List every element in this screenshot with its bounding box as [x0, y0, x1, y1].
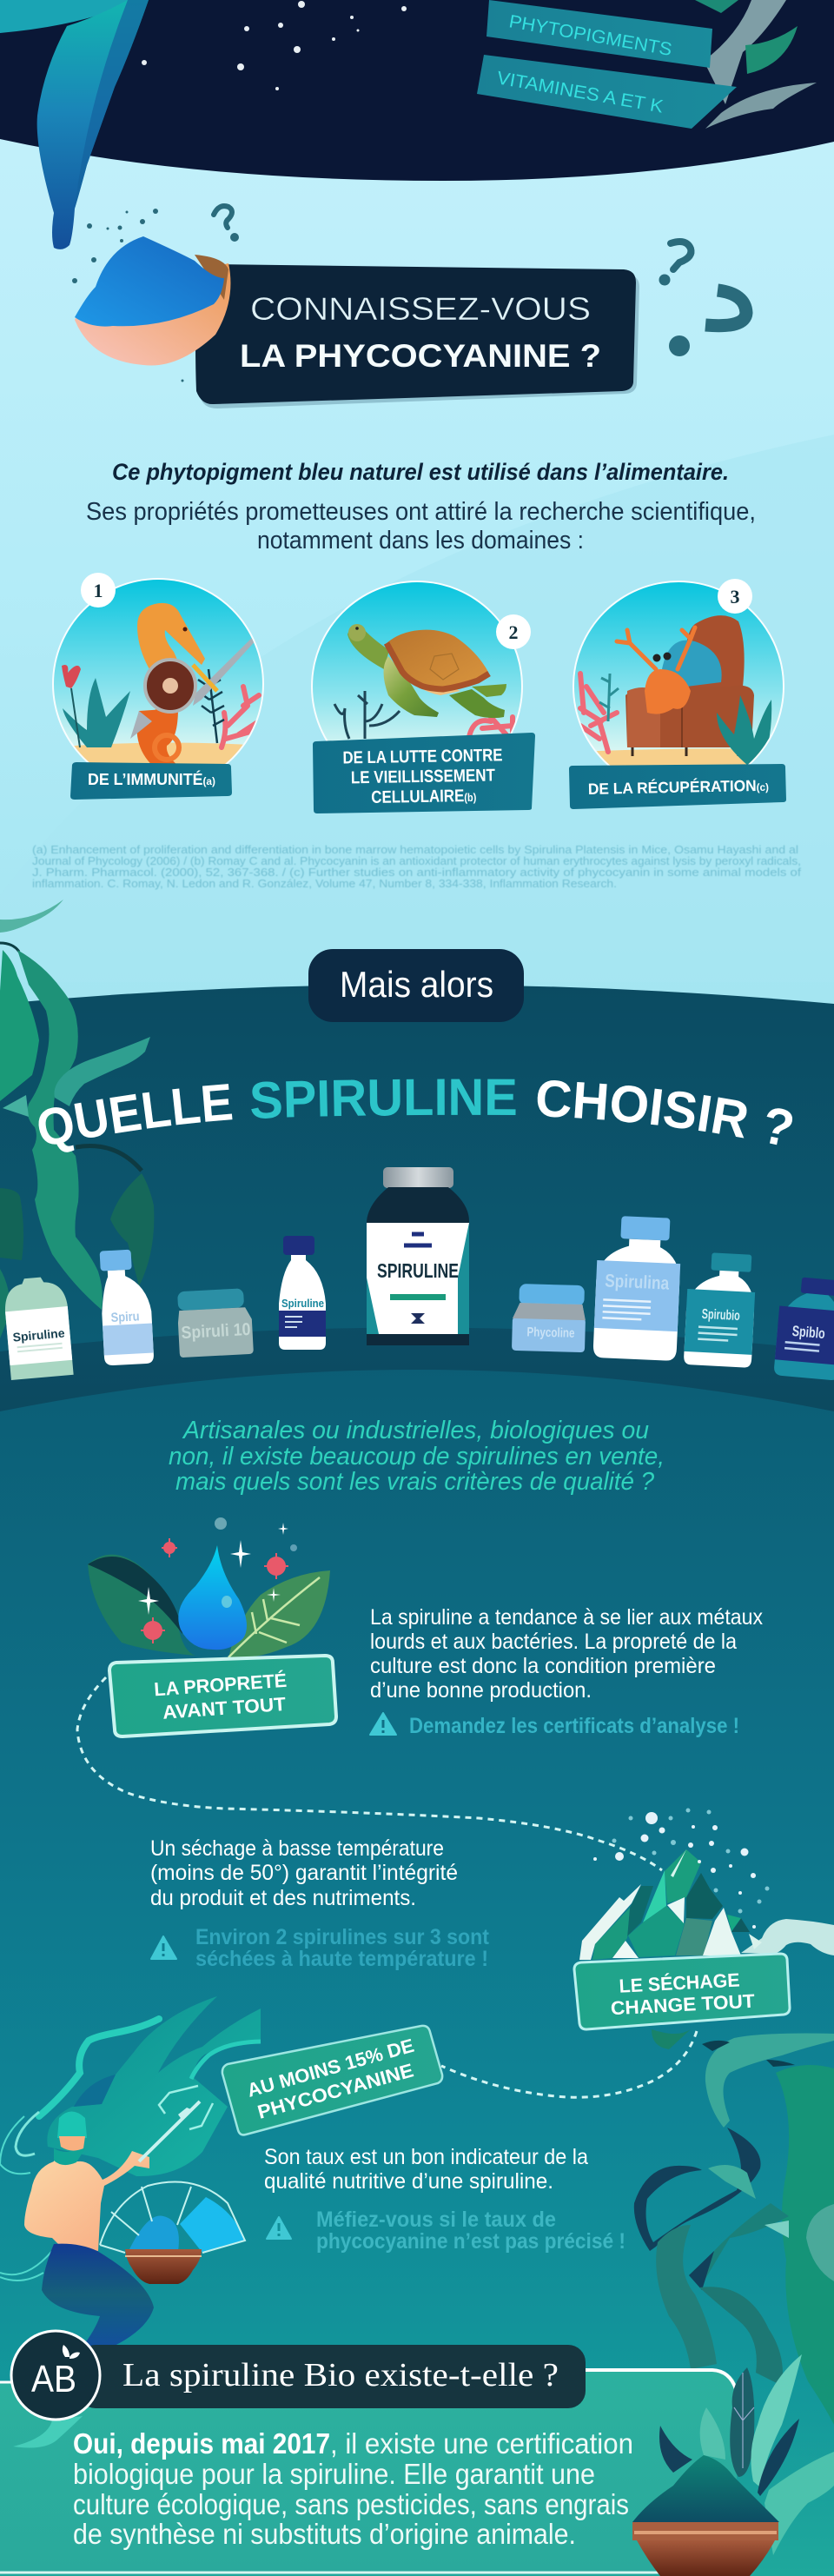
label: de l'immunité: DE L’IMMUNITÉ(a) [88, 770, 215, 788]
mermaid [0, 1996, 261, 2347]
bottle 6 [592, 1215, 682, 1361]
intro text: Ce phytopigment bleu naturel est utilisé dans l’alimentaire. [112, 459, 729, 485]
footnote references [32, 844, 802, 890]
text: propreté: La spiruline a tendance à se lier aux métaux [370, 1605, 763, 1630]
bottle 5: Phycoline [526, 1325, 575, 1341]
label: récupération [569, 764, 786, 809]
bottle 6: Spirulina [605, 1271, 670, 1294]
dashed journey path [77, 1677, 697, 2097]
background decoration: diagonal light band [0, 435, 834, 982]
badge 2 [496, 614, 531, 649]
bottle 2 [99, 1249, 154, 1365]
bottle 3: Spiruli 10 [181, 1320, 251, 1343]
badge 2: 2 [509, 621, 518, 643]
warning: haute température: Environ 2 spirulines sur 3 sont [195, 1925, 490, 1949]
turtle [348, 631, 389, 669]
panel: immunité [52, 573, 269, 800]
label: lutte [313, 733, 535, 813]
title line two: LA PHYCOCYANINE ? [240, 338, 601, 374]
bottle 7 [684, 1251, 757, 1368]
text: au moins 15% label [222, 2026, 442, 2134]
warning: méfiez-vous: phycocyanine n’est pas précisé ! [316, 2229, 626, 2254]
bottle 8 [773, 1276, 834, 1381]
footnote references: (a) Enhancement of proliferation and differentiation in bone marrow hematopoietic cells by Spirulina Platensis in Mice, Osamu Hayashi and al [32, 844, 798, 856]
label: le séchage change tout [574, 1954, 790, 2029]
body text: , il existe une certification [330, 2427, 633, 2460]
label: vitamines [477, 55, 737, 129]
sparkles [138, 1523, 288, 1615]
top dark night panel [0, 0, 834, 181]
intro question text: Artisanales ou industrielles, biologiques ou [182, 1417, 649, 1444]
mais alors pill: Mais alors [340, 964, 493, 1005]
warning: méfiez-vous [267, 2208, 626, 2254]
dark coral [334, 691, 400, 739]
icon: AB logo [11, 2331, 100, 2420]
whale tail [0, 0, 149, 249]
text: propreté: culture est donc la condition première [370, 1654, 716, 1678]
label: récupération: DE LA RÉCUPÉRATION(c) [588, 776, 769, 798]
heading: quelle spiruline choisir: QUELLE [38, 1084, 233, 1152]
badge 3 [718, 579, 752, 614]
intro text: Ses propriétés prometteuses ont attiré la recherche scientifique, [86, 498, 756, 526]
bottle 5 [512, 1284, 586, 1352]
label: la propreté avant tout: AVANT TOUT [162, 1693, 287, 1723]
body text: de synthèse ni substituts d’origine animale. [73, 2518, 576, 2550]
text: son taux: Son taux est un bon indicateur de la [264, 2145, 588, 2169]
plant [717, 695, 771, 769]
label: lutte: CELLULAIRE(b) [371, 787, 476, 807]
warning: haute température [151, 1925, 490, 1971]
panel: récupération [569, 579, 786, 809]
intro text: notamment dans les domaines : [257, 527, 584, 554]
coral [222, 687, 259, 747]
seahorse [137, 603, 205, 713]
text: propreté: d’une bonne production. [370, 1678, 592, 1703]
icon: bowl of blue powder [72, 209, 230, 382]
text: son taux: qualité nutritive d’une spiruline. [264, 2169, 553, 2194]
text: au moins 15% label: PHYCOCYANINE [255, 2059, 416, 2123]
seaweed right [634, 2029, 834, 2425]
vase of green powder [632, 2455, 779, 2576]
heading: La spiruline Bio existe-t-elle ? [122, 2357, 559, 2393]
bottle 4: Spiruline [281, 1297, 324, 1310]
foreground tail fin [13, 2416, 83, 2447]
intro question text [169, 1417, 665, 1496]
warning: haute température: séchées à haute température ! [195, 1947, 488, 1971]
label: la propreté avant tout: LA PROPRETÉ [154, 1670, 288, 1700]
bottle 1 [3, 1275, 74, 1380]
title card [195, 264, 639, 408]
icon: ice mountains [579, 1808, 834, 1960]
heading: quelle spiruline choisir [38, 1079, 792, 1152]
background: pale sky water [0, 0, 834, 1130]
bottle 2: Spiru [110, 1309, 140, 1325]
warning: méfiez-vous: Méfiez-vous si le taux de [316, 2208, 556, 2232]
bottle shelf band [0, 1328, 834, 1411]
body text: Oui, depuis mai 2017 [73, 2427, 330, 2460]
title line one: CONNAISSEZ-VOUS [250, 291, 591, 327]
warning: certificats: Demandez les certificats d’analyse ! [409, 1714, 739, 1738]
bottle main: spiruline [367, 1167, 469, 1345]
tail [42, 2244, 154, 2347]
snowflakes [593, 1812, 756, 1929]
body [24, 2151, 149, 2251]
heading: quelle spiruline choisir: SPIRULINE [251, 1079, 516, 1119]
leaves behind vase [659, 2354, 834, 2555]
bottle main: spiruline: SPIRULINE [377, 1259, 459, 1282]
text: séchage: du produit et des nutriments. [150, 1886, 416, 1910]
text: son taux [264, 2145, 588, 2194]
mais alors pill [308, 949, 524, 1022]
body text: biologique pour la spiruline. Elle garantit une [73, 2458, 595, 2490]
label: la propreté avant tout [109, 1656, 336, 1736]
bottle 3 [176, 1288, 254, 1358]
bottle 1: Spiruline [12, 1325, 65, 1344]
label: vitamines: VITAMINES A ET K [495, 68, 665, 117]
bottle 4 [279, 1236, 326, 1350]
label: de l'immunité [70, 762, 232, 800]
body text [73, 2427, 633, 2550]
coral [580, 674, 617, 752]
stars [142, 1, 407, 90]
panel: lutte contre le vieillissement [311, 581, 535, 813]
pink coral [469, 717, 513, 739]
text: propreté [370, 1605, 763, 1703]
icon: water drop with leaves [88, 1517, 330, 1658]
badge 3: 3 [730, 586, 740, 607]
armchair [685, 615, 745, 687]
label: le séchage change tout: CHANGE TOUT [610, 1990, 756, 2019]
heading pill [78, 2345, 586, 2408]
label: phytopigments: PHYTOPIGMENTS [507, 11, 673, 60]
label: lutte: DE LA LUTTE CONTRE [342, 746, 503, 767]
text: propreté: lourds et aux bactéries. La propreté de la [370, 1630, 737, 1654]
text: séchage: (moins de 50°) garantit l’intégrité [150, 1861, 458, 1885]
label: lutte: LE VIEILLISSEMENT [351, 766, 495, 787]
badge 1 [81, 573, 116, 607]
icon: question marks [214, 206, 746, 356]
text: séchage: Un séchage à basse température [150, 1836, 444, 1861]
bottle 7: Spirubio [701, 1307, 740, 1324]
intro text [86, 459, 756, 554]
icon: AB logo: AB [31, 2358, 76, 2400]
panel: la spiruline bio [0, 2331, 737, 2573]
footnote references: J. Pharm. Pharmacol. (2000), 52, 367-368. / (c) Further studies on anti-inflammatory activity of phycocyanin in some animal models of [32, 866, 802, 879]
label: le séchage change tout: LE SÉCHAGE [619, 1969, 740, 1997]
heading: quelle spiruline choisir: CHOISIR ? [537, 1080, 792, 1145]
hermit crab [662, 641, 722, 687]
hair [47, 1996, 261, 2176]
intro question text: non, il existe beaucoup de spirulines en vente, [169, 1443, 665, 1471]
label: phytopigments [486, 0, 712, 68]
fan and powder [100, 2181, 245, 2284]
badge 1: 1 [94, 580, 103, 601]
seaweed left [0, 900, 154, 1338]
sword [193, 638, 254, 706]
seaweed beside labels [695, 0, 817, 129]
intro question text: mais quels sont les vrais critères de qualité ? [175, 1468, 655, 1496]
plant [63, 678, 130, 747]
footnote references: Journal of Phycology (2006) / (b) Romay C and al. Phycocyanin is an antioxidant protector of human erythrocytes against lysis by peroxyl radicals, [32, 855, 801, 867]
shield [145, 660, 195, 712]
body text: culture écologique, sans pesticides, sans engrais [73, 2488, 629, 2520]
footnote references: inflammation. C. Romay, N. Ledon and R. González, Volume 47, Number 8, 334-338, Inflammation Research. [32, 878, 617, 890]
text: séchage [150, 1836, 458, 1910]
trident [139, 2101, 200, 2161]
viruses [143, 1542, 286, 1640]
text: au moins 15% label: AU MOINS 15% DE [245, 2035, 416, 2101]
deep water section background [0, 985, 834, 2576]
